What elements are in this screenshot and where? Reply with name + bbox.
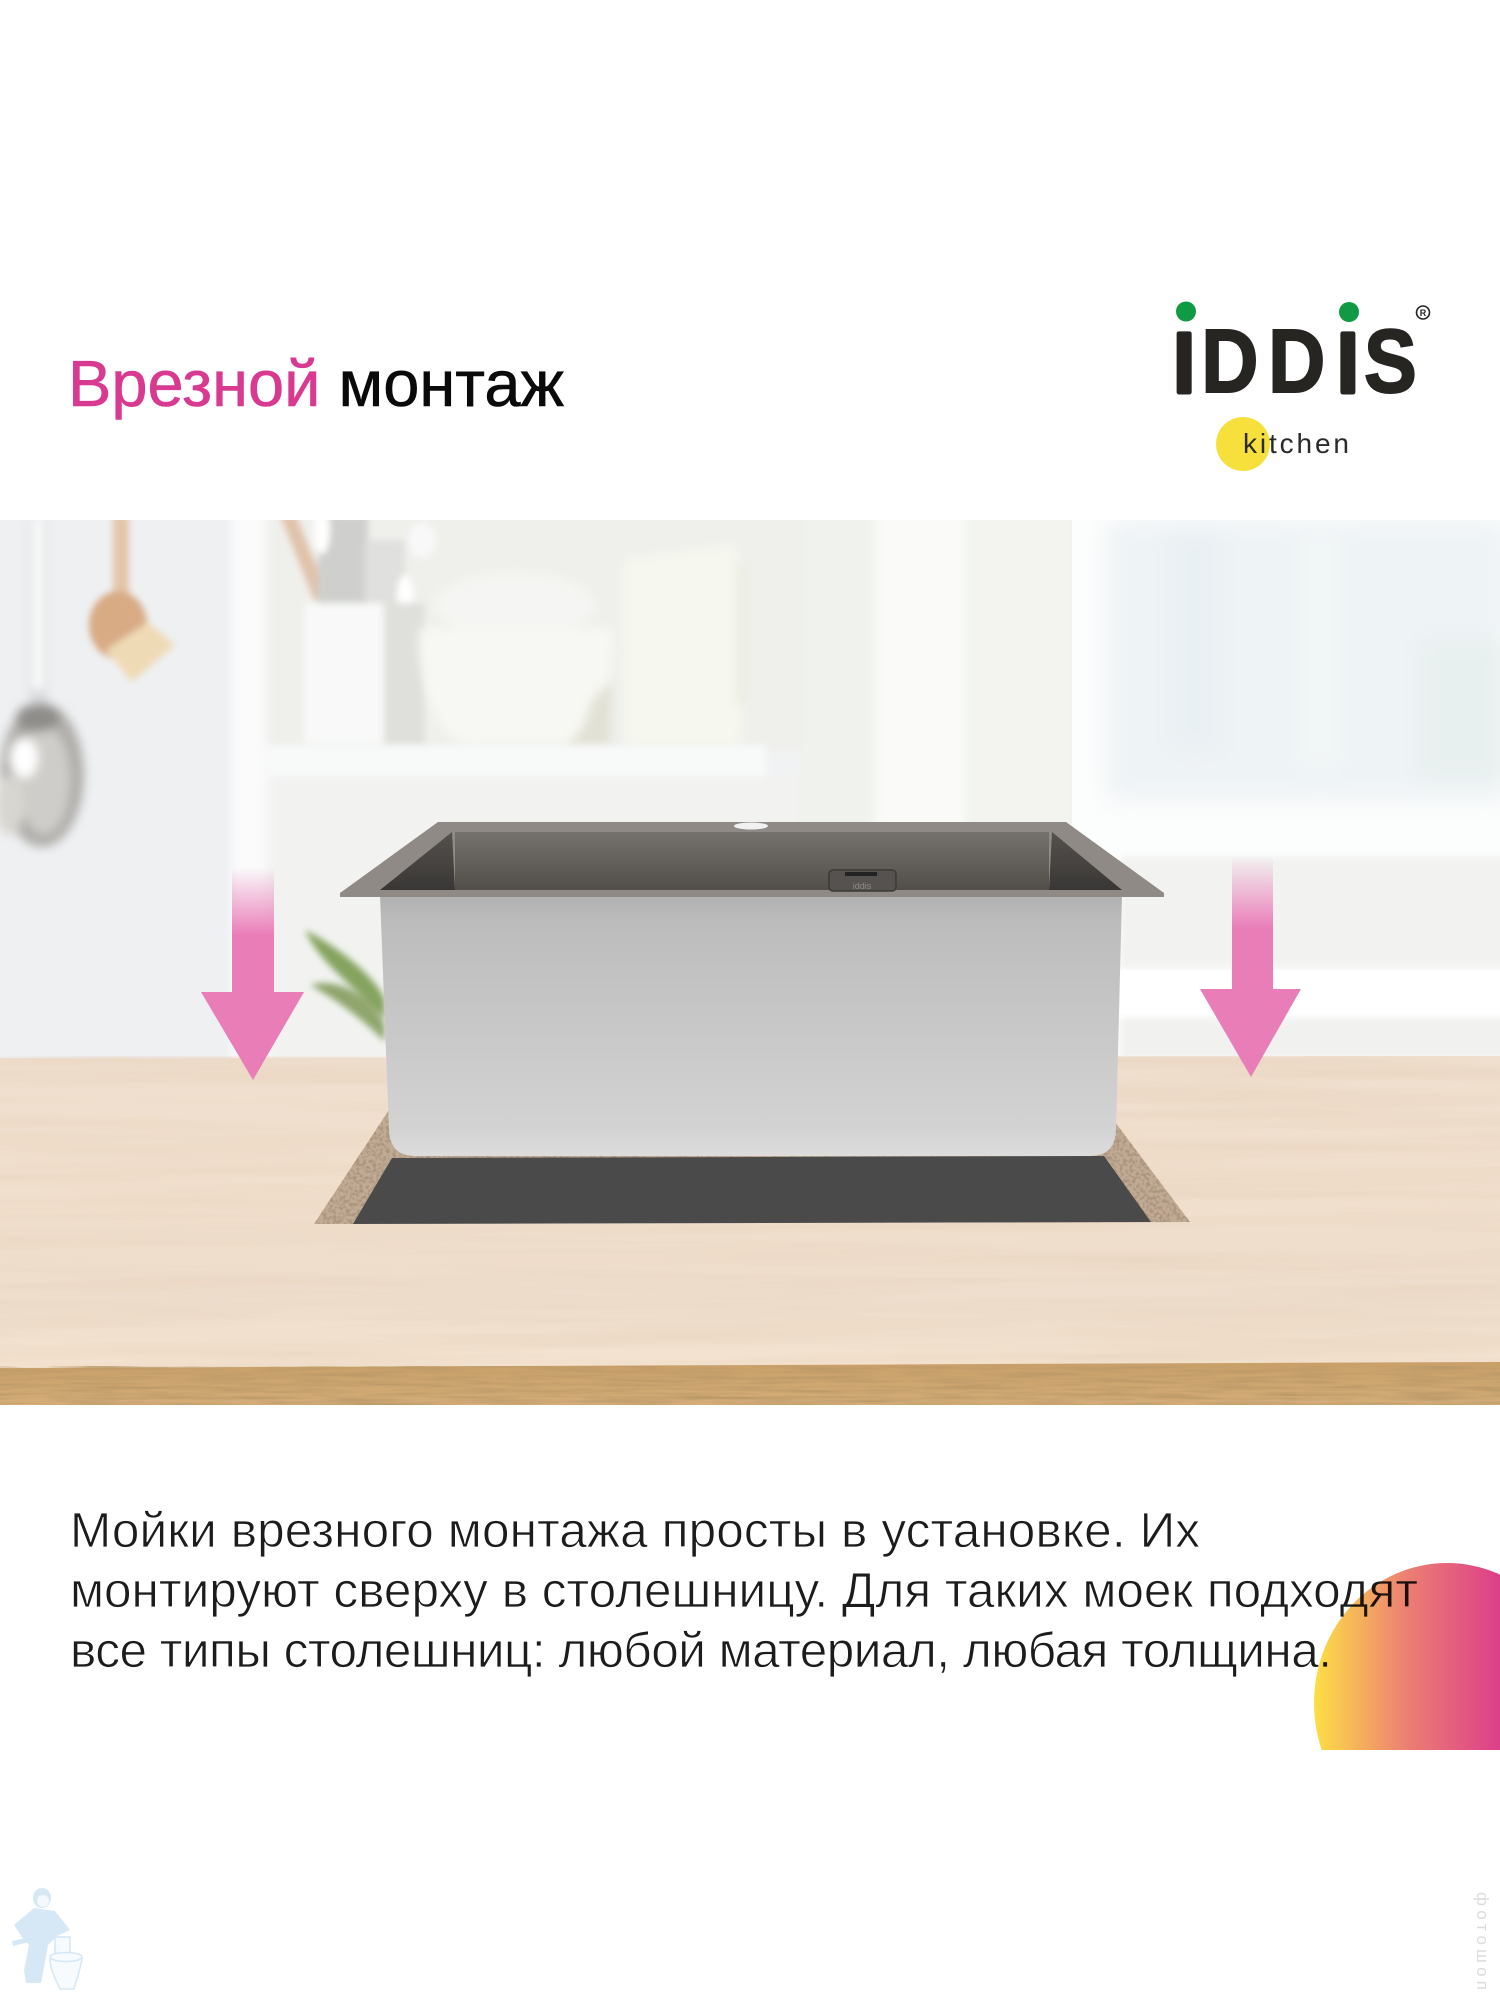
body text [70,1503,1418,1678]
sink side walls [380,832,1122,890]
logo wordmark: IDDIS [1174,310,1417,411]
watermark: vertical site text: фотошоп [1473,1892,1492,1990]
sink [340,822,1164,1156]
body text: Мойки врезного монтажа просты в установке. Их [70,1503,1200,1558]
logo yellow spot [1207,408,1279,480]
registered mark: R [1420,308,1427,318]
logo: IDDIS kitchen [1174,302,1430,480]
stacked bowls [418,629,614,745]
countertop surface [0,1056,1500,1368]
sink body [380,895,1122,1156]
body text: монтируют сверху в столешницу. Для таких моек подходят [70,1563,1418,1618]
sink back wall [455,832,1049,890]
drain overflow: iddis [853,881,872,891]
shelf board [275,744,760,754]
utensil holder and utensils [280,506,436,745]
title: Врезной монтаж [68,347,565,420]
wooden spatula [89,515,175,682]
watermark: plumber figure [12,1888,82,1989]
green plant [305,930,385,1042]
cut-out dark opening [353,1156,1151,1224]
body text: все типы столешниц: любой материал, любая толщина. [70,1623,1332,1678]
arrow: left [201,867,304,1080]
tap hole [734,822,768,830]
hanging ladle [0,690,90,852]
window [1072,520,1500,1020]
drain overflow [829,870,896,891]
plumber face [37,1895,49,1907]
cut-out chipboard sides [314,1111,1190,1224]
gradient semicircle accent [1314,1563,1500,1750]
wall and cabinet panels [238,520,959,1056]
registered mark [1416,306,1430,319]
countertop front edge [0,1362,1500,1405]
sink rim [340,822,1164,897]
plumber body [12,1888,70,1983]
logo kitchen text: kitchen [1243,428,1349,459]
toilet [50,1937,82,1989]
arrow: right [1200,856,1301,1077]
white pitcher [625,545,749,745]
photo: blurred kitchen background [0,500,1500,1080]
logo green dots [1176,302,1359,322]
